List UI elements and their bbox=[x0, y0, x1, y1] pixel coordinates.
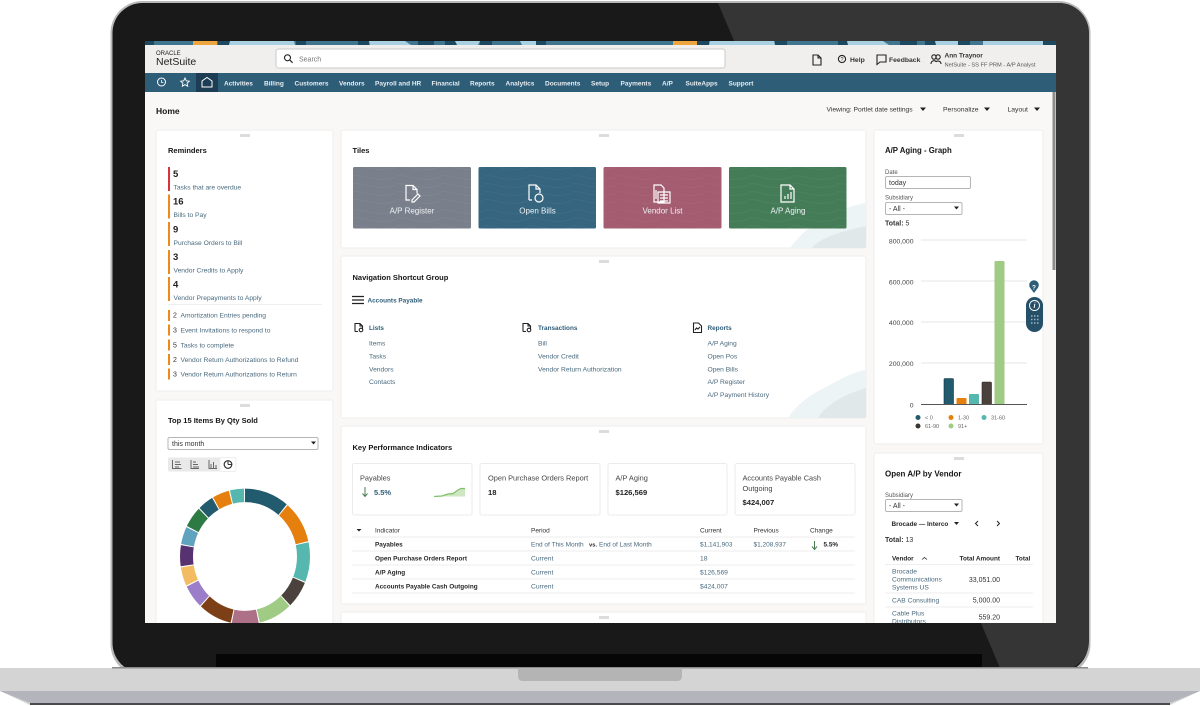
reminders heading: Reminders bbox=[168, 146, 207, 155]
bar chart bbox=[889, 238, 1027, 410]
KPI card: cash outgoing bbox=[735, 464, 855, 515]
reminder: vendor prepayments: Vendor Prepayments to Apply bbox=[174, 295, 262, 302]
bar chart legend: 31-60 bbox=[991, 416, 1005, 422]
vendor table: 5,000.00 bbox=[973, 598, 1000, 604]
KPI card: cash outgoing: Outgoing bbox=[742, 484, 772, 493]
reminder: purchase orders: Purchase Orders to Bill bbox=[174, 240, 243, 247]
secondary reminders list: 2 bbox=[173, 357, 177, 364]
bar chart legend: < 0 bbox=[925, 416, 933, 422]
column: transactions: Bill bbox=[538, 340, 547, 348]
table header: Change bbox=[810, 528, 833, 534]
tile: Open Bills bbox=[478, 167, 596, 228]
floating help widget: i bbox=[1034, 303, 1037, 310]
row: payables bbox=[375, 541, 838, 550]
nav labels: Reports bbox=[470, 80, 495, 87]
panel: key performance indicators bbox=[341, 426, 866, 604]
subsidiary filter bbox=[885, 493, 962, 512]
secondary reminders list: Vendor Return Authorizations to Refund bbox=[180, 357, 299, 364]
NetSuite logo: ORACLE bbox=[156, 51, 181, 57]
secondary reminders list: Event Invitations to respond to bbox=[180, 328, 271, 334]
NetSuite logo bbox=[156, 50, 196, 65]
table header: Indicator bbox=[375, 528, 401, 534]
vendor heading: Open A/P by Vendor bbox=[885, 470, 961, 478]
reminder: purchase orders: 9 bbox=[173, 224, 178, 235]
vendor table: Systems US bbox=[892, 584, 929, 592]
nav labels: Activities bbox=[224, 80, 253, 87]
chart type buttons bbox=[168, 458, 236, 472]
nav labels: Payments bbox=[620, 80, 652, 87]
nav labels: Setup bbox=[591, 80, 609, 87]
row: payables: End of Last Month bbox=[599, 542, 652, 548]
bar chart legend bbox=[916, 415, 1005, 430]
reminder: tasks overdue: 5 bbox=[173, 169, 179, 180]
column: transactions: Vendor Return Authorization bbox=[538, 366, 622, 374]
bar chart: 800,000 bbox=[889, 238, 914, 246]
column: reports: Open Pos bbox=[708, 354, 738, 360]
row: open purchase orders: Current bbox=[531, 556, 553, 562]
search box: Search bbox=[299, 56, 321, 64]
tile: A/P Register bbox=[353, 167, 471, 228]
vendor total: Total: 13 bbox=[885, 537, 913, 544]
row: A/P aging bbox=[375, 570, 728, 576]
row: payables: $1,141,903 bbox=[700, 542, 733, 548]
column: reports: A/P Aging bbox=[708, 340, 737, 348]
date filter: Date bbox=[885, 170, 898, 176]
row: A/P aging: Current bbox=[531, 570, 553, 576]
row: open purchase orders: Open Purchase Orders Report bbox=[375, 556, 468, 562]
column: lists: Tasks bbox=[369, 354, 387, 360]
panel: A/P aging graph bbox=[874, 130, 1043, 444]
KPI card: payables: Payables bbox=[360, 474, 391, 482]
table header: Period bbox=[531, 528, 550, 534]
view controls: Layout bbox=[1008, 106, 1028, 114]
NetSuite screen bbox=[145, 41, 1056, 652]
tile: Open Bills: Open Bills bbox=[519, 206, 556, 216]
tiles heading: Tiles bbox=[352, 146, 369, 155]
row: cash outgoing: Current bbox=[531, 584, 553, 590]
navigation bar bbox=[145, 73, 1056, 92]
column: transactions: Vendor Credit bbox=[538, 354, 579, 360]
row: A/P aging: A/P Aging bbox=[375, 570, 405, 576]
nav labels: Vendors bbox=[339, 80, 365, 87]
column: lists: Vendors bbox=[369, 366, 394, 374]
vendor table: 33,051.00 bbox=[969, 577, 1000, 584]
top 15 heading: Top 15 Items By Qty Sold bbox=[168, 416, 258, 425]
nav labels: Support bbox=[728, 80, 754, 87]
secondary reminders list: 3 bbox=[173, 372, 177, 379]
reminder: vendor credits bbox=[168, 250, 244, 274]
reminder: bills to pay: 16 bbox=[173, 197, 184, 208]
vendor table: Cable Plus bbox=[892, 610, 925, 618]
header actions bbox=[813, 52, 1036, 68]
view controls bbox=[826, 107, 1040, 113]
header actions: Feedback bbox=[889, 57, 921, 64]
tile: A/P Register: A/P Register bbox=[390, 206, 435, 216]
nav icons bbox=[158, 78, 212, 87]
reminder: purchase orders bbox=[168, 222, 243, 247]
row: cash outgoing: Accounts Payable Cash Outgoing bbox=[375, 584, 478, 590]
row: A/P aging: $126,569 bbox=[700, 570, 728, 576]
subsidiary filter: - All - bbox=[889, 206, 906, 213]
column: reports bbox=[694, 323, 770, 399]
tile: A/P Aging: A/P Aging bbox=[770, 206, 806, 216]
row: payables: End of This Month bbox=[531, 542, 584, 548]
decorative leaf bbox=[790, 203, 866, 248]
column: lists: Lists bbox=[369, 325, 384, 332]
secondary reminders list: 5 bbox=[173, 342, 177, 349]
KPI card: payables bbox=[352, 464, 472, 515]
nav labels: Billing bbox=[264, 80, 284, 87]
month select bbox=[168, 438, 318, 450]
reminder: tasks overdue: Tasks that are overdue bbox=[174, 184, 241, 192]
vendor table: Communications bbox=[892, 576, 942, 584]
reminder: vendor prepayments bbox=[168, 277, 262, 302]
tile: Vendor List bbox=[604, 167, 722, 228]
floating help widget: ? bbox=[1032, 284, 1036, 292]
secondary reminders list: 2 bbox=[173, 312, 177, 320]
KPI card: A/P aging bbox=[608, 464, 727, 515]
decorative leaf bbox=[788, 370, 866, 418]
vendor table: 559.20 bbox=[979, 614, 1000, 622]
table header bbox=[356, 528, 833, 534]
nav labels: Documents bbox=[545, 80, 581, 87]
column: reports: A/P Payment History bbox=[708, 392, 770, 399]
view controls: Viewing: Portlet date settings bbox=[826, 106, 913, 114]
laptop base bbox=[0, 667, 1200, 705]
header actions: ? bbox=[840, 57, 844, 63]
accounts payable menu: Accounts Payable bbox=[368, 298, 423, 304]
bar chart: 400,000 bbox=[889, 320, 914, 327]
vendor table: Brocade bbox=[892, 568, 917, 576]
vendor table bbox=[885, 556, 1033, 626]
nav labels: SuiteApps bbox=[686, 80, 718, 87]
row: payables: 5.5% bbox=[824, 542, 838, 548]
KPI card: cash outgoing: Accounts Payable Cash bbox=[742, 474, 821, 482]
secondary reminders list bbox=[168, 310, 299, 380]
date filter: today bbox=[889, 180, 907, 187]
bar chart: 0 bbox=[910, 402, 914, 410]
subsidiary filter bbox=[885, 196, 962, 214]
row: cash outgoing: $424,007 bbox=[700, 584, 728, 590]
column: lists: Contacts bbox=[369, 379, 396, 386]
KPI heading: Key Performance Indicators bbox=[352, 443, 452, 452]
floating help widget bbox=[1026, 280, 1043, 332]
page title: Home bbox=[156, 106, 180, 116]
subsidiary filter: - All - bbox=[889, 503, 906, 510]
column: transactions bbox=[523, 324, 622, 374]
nav labels: Analytics bbox=[506, 80, 535, 87]
NetSuite logo: NetSuite bbox=[156, 56, 196, 68]
reminder: bills to pay: Bills to Pay bbox=[174, 212, 207, 219]
view controls: Personalize bbox=[943, 106, 979, 114]
column: lists bbox=[355, 324, 396, 386]
KPI card: open purchase orders: 18 bbox=[488, 488, 496, 497]
vendor table: Total bbox=[1016, 556, 1031, 562]
bar chart: 200,000 bbox=[889, 361, 914, 368]
KPI card: cash outgoing: $424,007 bbox=[742, 498, 774, 507]
KPI card: payables: 5.5% bbox=[374, 488, 391, 497]
row: payables: Payables bbox=[375, 542, 403, 548]
vendor pager: Brocade — Interco bbox=[892, 521, 948, 528]
row: open purchase orders bbox=[375, 556, 708, 562]
bar chart legend: 91+ bbox=[958, 424, 967, 430]
header actions: NetSuite - SS FF PRM - A/P Analyst bbox=[944, 62, 1036, 68]
laptop lid bbox=[110, 1, 1090, 676]
date filter bbox=[885, 170, 970, 188]
panel: reminders bbox=[156, 130, 333, 391]
header actions: Help bbox=[850, 57, 865, 64]
panel: open A/P by vendor bbox=[874, 453, 1043, 643]
tile: Vendor List: Vendor List bbox=[642, 206, 683, 216]
panel: top 15 items bbox=[156, 400, 333, 640]
reminder: vendor prepayments: 4 bbox=[173, 280, 179, 290]
bar chart legend: 61-90 bbox=[925, 424, 939, 430]
vendor table: Total Amount bbox=[960, 556, 1001, 562]
secondary reminders list: Amortization Entries pending bbox=[180, 312, 266, 320]
KPI card: open purchase orders bbox=[480, 464, 600, 515]
reminder: vendor credits: 3 bbox=[173, 252, 178, 263]
reminder: bills to pay bbox=[168, 194, 207, 219]
graph heading: A/P Aging - Graph bbox=[885, 146, 952, 155]
panel: empty lower portlet bbox=[341, 612, 866, 652]
secondary reminders list: Tasks to complete bbox=[180, 342, 234, 349]
navigation heading: Navigation Shortcut Group bbox=[352, 273, 449, 282]
header bar bbox=[145, 45, 1056, 73]
secondary reminders list: 3 bbox=[173, 328, 177, 334]
scrollbar bbox=[1052, 92, 1056, 270]
subsidiary filter: Subsidiary bbox=[885, 196, 913, 202]
column: lists: Items bbox=[369, 340, 386, 348]
table header: Current bbox=[700, 528, 722, 534]
column: reports: Open Bills bbox=[708, 366, 739, 374]
vendor table: CAB Consulting bbox=[892, 598, 939, 604]
table header: Previous bbox=[754, 528, 780, 534]
row: cash outgoing bbox=[375, 584, 728, 590]
nav labels bbox=[224, 81, 754, 87]
row: payables: vs. bbox=[589, 542, 597, 548]
vendor table: Distributors bbox=[892, 618, 926, 626]
column: transactions: Transactions bbox=[538, 325, 578, 332]
panel: navigation shortcut group bbox=[341, 256, 866, 418]
reminder: tasks overdue bbox=[168, 167, 241, 192]
bar chart: 600,000 bbox=[889, 280, 914, 286]
reminder: vendor credits: Vendor Credits to Apply bbox=[174, 267, 244, 274]
decorative top banner strip bbox=[145, 41, 1056, 45]
nav labels: Customers bbox=[294, 80, 329, 87]
nav labels: Payroll and HR bbox=[375, 80, 422, 87]
secondary reminders list: Vendor Return Authorizations to Return bbox=[180, 372, 297, 379]
column: reports: Reports bbox=[708, 325, 732, 332]
row: open purchase orders: 18 bbox=[700, 556, 708, 562]
donut chart bbox=[186, 495, 304, 618]
vendor table: Vendor bbox=[892, 556, 914, 562]
accounts payable menu bbox=[352, 296, 423, 304]
month select: this month bbox=[172, 441, 204, 448]
KPI card: open purchase orders: Open Purchase Orders Report bbox=[488, 474, 588, 482]
tile: A/P Aging bbox=[729, 167, 846, 228]
total count: Total: 5 bbox=[885, 220, 909, 228]
row: payables: $1,208,937 bbox=[754, 542, 786, 548]
subsidiary filter: Subsidiary bbox=[885, 493, 913, 499]
search box bbox=[276, 49, 725, 68]
KPI table bbox=[352, 528, 855, 593]
nav labels: A/P bbox=[662, 80, 674, 87]
panel: tiles bbox=[341, 130, 866, 248]
KPI card: A/P aging: A/P Aging bbox=[616, 474, 648, 482]
nav labels: Financial bbox=[432, 80, 460, 87]
header actions: Ann Traynor bbox=[944, 52, 983, 60]
column: reports: A/P Register bbox=[708, 379, 746, 386]
KPI card: A/P aging: $126,569 bbox=[616, 488, 647, 497]
bar chart legend: 1-30 bbox=[958, 416, 969, 422]
vendor pager bbox=[892, 521, 1000, 528]
